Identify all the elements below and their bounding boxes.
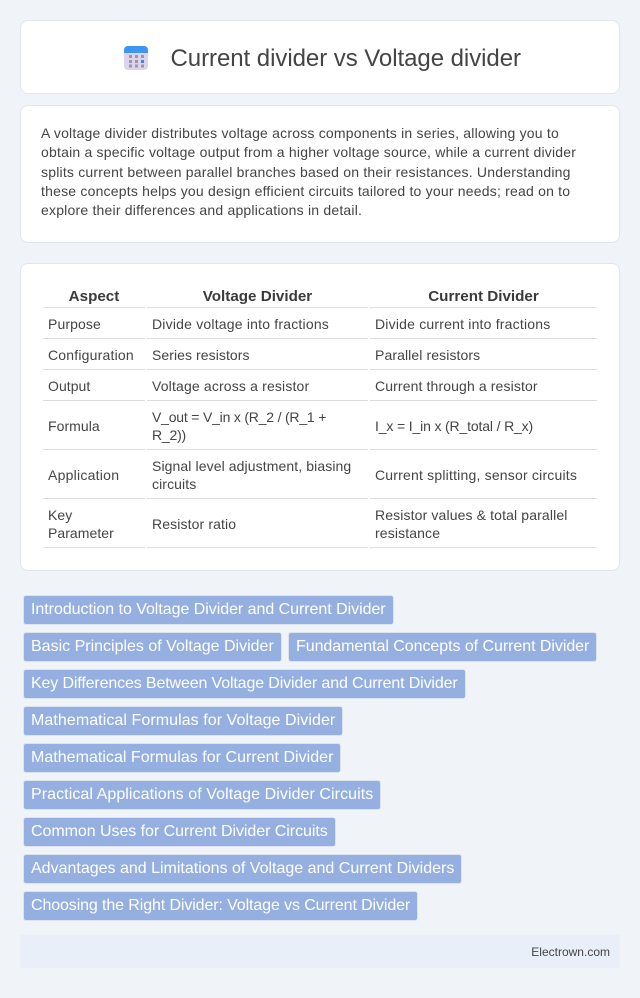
intro paragraph: these concepts helps you design efficient circuits tailored to your needs; read on to xyxy=(41,183,570,199)
tag: current formulas xyxy=(23,743,341,773)
table header: aspect: Aspect xyxy=(69,288,119,305)
tag: choosing xyxy=(23,891,418,921)
title: Current divider vs Voltage divider xyxy=(170,45,521,72)
row: key parameter: Key xyxy=(48,507,72,523)
footer credit: Electrown.com xyxy=(531,945,610,959)
tag: current uses: Common Uses for Current Divider Circuits xyxy=(31,823,328,840)
tag: fundamental concepts: Fundamental Concepts of Current Divider xyxy=(296,638,589,655)
tag: basic principles xyxy=(23,632,282,662)
intro paragraph xyxy=(41,125,576,218)
comparison table panel: Signal level adjustment, biasing xyxy=(152,458,351,474)
comparison table panel: resistance xyxy=(375,525,440,541)
comparison table panel: Current through a resistor xyxy=(375,378,538,394)
tag: advantages: Advantages and Limitations of Voltage and Current Dividers xyxy=(31,860,454,877)
comparison table panel: R_2)) xyxy=(152,427,186,443)
intro paragraph: obtain a specific voltage output from a higher voltage source, while a current divider xyxy=(41,144,576,160)
row: formula: Formula xyxy=(48,418,100,434)
row: configuration: Configuration xyxy=(48,347,134,363)
tag: current formulas: Mathematical Formulas for Current Divider xyxy=(31,749,333,766)
header panel xyxy=(20,20,620,94)
comparison table panel: Parallel resistors xyxy=(375,347,480,363)
intro paragraph: splits current between parallel branches based on their resistances. Understanding xyxy=(41,164,571,180)
tag: introduction xyxy=(23,595,394,625)
tag: key differences: Key Differences Between Voltage Divider and Current Divider xyxy=(31,675,458,692)
comparison table panel xyxy=(20,263,620,571)
comparison table panel: Divide voltage into fractions xyxy=(152,316,329,332)
comparison table panel: Current splitting, sensor circuits xyxy=(375,467,577,483)
comparison table panel: Resistor ratio xyxy=(152,516,236,532)
tag: current uses xyxy=(23,817,336,847)
tag: introduction: Introduction to Voltage Divider and Current Divider xyxy=(31,601,386,618)
row: key parameter: Parameter xyxy=(48,525,114,541)
comparison table panel: I_x = I_in x (R_total / R_x) xyxy=(375,418,533,434)
comparison table panel: Divide current into fractions xyxy=(375,316,550,332)
comparison table panel: V_out = V_in x (R_2 / (R_1 + xyxy=(152,409,326,425)
footer xyxy=(20,935,620,968)
comparison table panel: Resistor values & total parallel xyxy=(375,507,567,523)
tag: voltage applications: Practical Applications of Voltage Divider Circuits xyxy=(31,786,373,803)
comparison table panel: circuits xyxy=(152,476,196,492)
comparison table panel: Voltage across a resistor xyxy=(152,378,309,394)
tag: advantages xyxy=(23,854,462,884)
table header: current divider: Current Divider xyxy=(428,288,539,305)
row: application: Application xyxy=(48,467,119,483)
tag: voltage applications xyxy=(23,780,381,810)
tag: voltage formulas xyxy=(23,706,343,736)
intro text panel xyxy=(20,105,620,243)
row: key parameter xyxy=(48,507,114,541)
tag: voltage formulas: Mathematical Formulas for Voltage Divider xyxy=(31,712,335,729)
tag: choosing: Choosing the Right Divider: Voltage vs Current Divider xyxy=(31,897,410,914)
row: output: Output xyxy=(48,378,90,394)
table header: voltage divider: Voltage Divider xyxy=(203,288,312,305)
icon: calendar xyxy=(124,46,148,70)
comparison table panel: Series resistors xyxy=(152,347,250,363)
tag: key differences xyxy=(23,669,466,699)
intro paragraph: explore their differences and applications in detail. xyxy=(41,202,362,218)
row: purpose: Purpose xyxy=(48,316,101,332)
tag: basic principles: Basic Principles of Voltage Divider xyxy=(31,638,274,655)
tag: fundamental concepts xyxy=(288,632,597,662)
intro paragraph: A voltage divider distributes voltage across components in series, allowing you to xyxy=(41,125,559,141)
